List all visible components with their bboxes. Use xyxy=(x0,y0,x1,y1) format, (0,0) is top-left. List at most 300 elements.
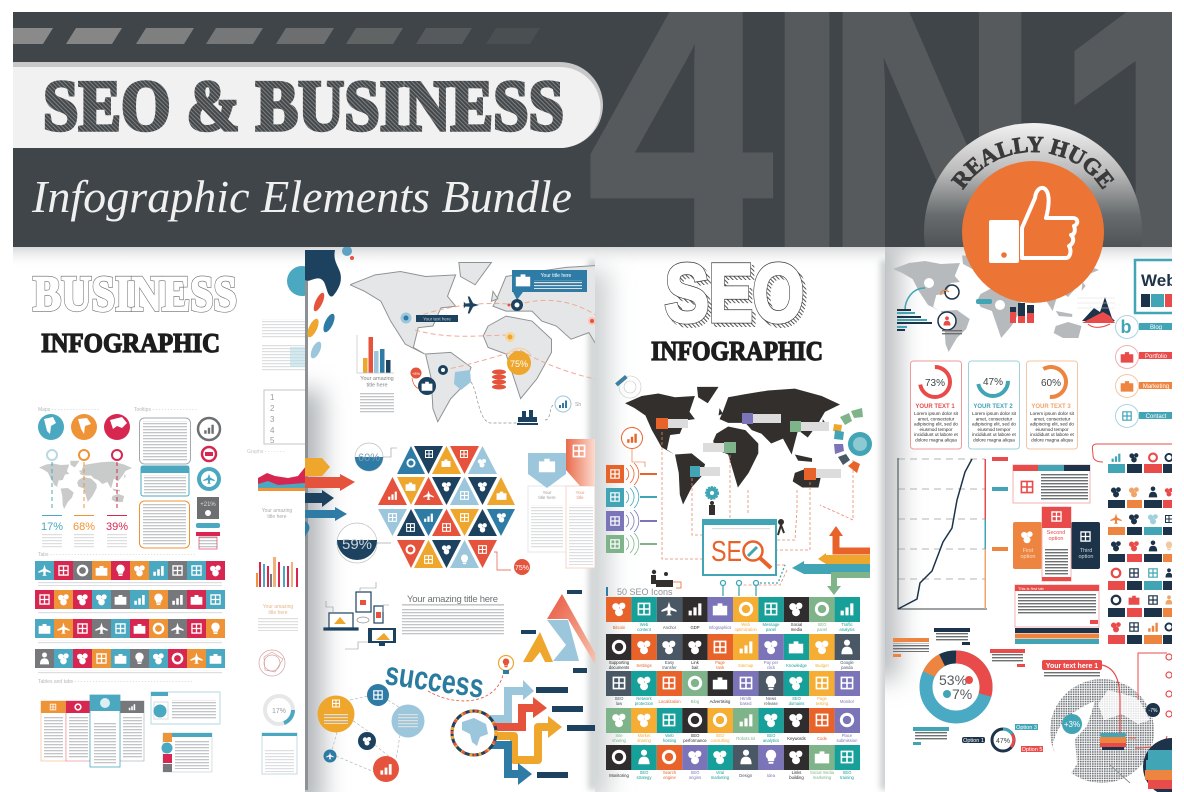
seo icon row 4 captions: Keywords xyxy=(787,736,806,741)
icon tabs row 2 xyxy=(35,590,225,609)
seo icon row 2 captions: rank xyxy=(716,665,725,670)
gray world map xyxy=(39,461,132,509)
donut chart: 53% xyxy=(939,672,967,688)
stat card 73%: dolore magna aliqua xyxy=(915,438,957,442)
globe stat -7% xyxy=(1146,703,1160,717)
peek page: area chart xyxy=(247,449,306,491)
seo icon row 4 captions: SEO xyxy=(767,733,775,738)
pill: your text here 1 xyxy=(1042,660,1120,735)
seo icon row 1 captions: SEO xyxy=(818,622,826,627)
peek page: donut xyxy=(265,696,293,724)
circle chart icon xyxy=(555,396,581,412)
stat card 60%: incididunt ut labore et xyxy=(1030,432,1075,437)
seo icon row 2 captions: documents xyxy=(609,665,629,670)
heading: infographic: INFOGRAPHIC xyxy=(651,336,823,366)
seo icon row 3 captions: Localization xyxy=(658,699,681,704)
icon: thumb xyxy=(989,188,1077,263)
heading: business: BUSINESS xyxy=(33,265,237,321)
seo browser window xyxy=(703,519,784,575)
triangle mosaic row 1 xyxy=(397,446,497,474)
seo icon row 4 captions: Code xyxy=(817,736,828,741)
seo icon row 5 captions: origins xyxy=(689,775,701,780)
seo icon row 2 captions: transfer xyxy=(662,665,677,670)
orange stat 75% xyxy=(507,348,531,375)
icon grid icons xyxy=(1110,453,1174,632)
seo icon row 4 captions: SEO xyxy=(691,733,699,738)
dashed ship route xyxy=(471,382,556,423)
seo icon row 3 captions: domains xyxy=(789,701,804,706)
peek page: note card xyxy=(262,733,297,774)
dark world map xyxy=(625,387,840,505)
pennant card: red: title xyxy=(576,495,584,500)
subtitle: Infographic Elements Bundle xyxy=(31,171,572,222)
seo icon row 3 captions: based xyxy=(740,701,752,706)
pennant card: blue xyxy=(528,453,566,552)
heading: success: success xyxy=(383,654,486,705)
stat card 60%: dolore magna aliqua xyxy=(1031,438,1073,442)
seo icon row 1 captions: Bitcoin xyxy=(613,625,626,630)
seo icon row 2 captions: Sitemap xyxy=(738,663,754,668)
seo icon row 3 captions xyxy=(615,696,855,706)
peek page: donut: 17% xyxy=(272,708,286,715)
seo icon row 5 captions: Monitoring xyxy=(609,773,629,778)
chart title xyxy=(360,376,394,413)
seo icon row 1 captions xyxy=(613,622,855,632)
page 1: business infographic xyxy=(33,265,317,774)
big 4in1 background lettering xyxy=(588,0,1184,391)
stat card 73%: eiusmod tempor xyxy=(920,427,953,432)
seo icon row 5 captions: building xyxy=(789,775,804,780)
percentage stats: 68% xyxy=(73,521,95,533)
options block xyxy=(1013,507,1100,581)
callout: your title here xyxy=(512,270,587,300)
percentage stats: 17% xyxy=(41,521,63,533)
section labels xyxy=(38,407,197,685)
triangle icons xyxy=(388,450,506,564)
heading: seo: SEO xyxy=(665,248,804,339)
stat card 47%: adipiscing elit, sed do xyxy=(972,422,1016,427)
section labels: Maps - - - - - - - - - - - - - - - - xyxy=(38,407,99,413)
pennant card: red xyxy=(566,439,595,568)
side navigation: Contact xyxy=(1146,414,1167,420)
seo icon row 4 captions: sharing xyxy=(612,738,627,743)
seo icon row 2 captions: Budget xyxy=(815,663,829,668)
world map xyxy=(350,262,595,423)
tooltip icons: +21% xyxy=(200,502,216,508)
seo icon row 1 captions: optimization xyxy=(735,627,758,632)
pennant card: blue: Your xyxy=(542,490,552,495)
side navigation: Blog xyxy=(1150,325,1162,331)
seo icon row 4 xyxy=(606,708,860,733)
icon grid title: 50 SEO Icons xyxy=(617,587,673,597)
heading: your amazing title here: Your amazing title here xyxy=(407,594,498,605)
badge ring xyxy=(924,123,1142,341)
peek page: numbered list: 4 xyxy=(270,426,275,435)
top banner xyxy=(13,12,1172,247)
seo icon row 4 captions: Market xyxy=(638,733,650,738)
seo icon row 1 captions: Traffic xyxy=(841,622,853,627)
stat circle 59% xyxy=(337,523,391,563)
map pin: north america: Your text here xyxy=(423,316,451,322)
devices xyxy=(324,582,396,649)
side navigation xyxy=(1116,316,1173,428)
seo icon row 3 captions: SEO xyxy=(615,696,623,701)
seo icon row 4 captions: analytics xyxy=(763,738,779,743)
seo icon row 5 captions: Links xyxy=(792,770,801,775)
seo icon row 5 captions: SEO xyxy=(843,770,851,775)
seo icon row 1 captions: panel xyxy=(766,627,776,632)
chevron triangles xyxy=(521,590,595,673)
route lines xyxy=(415,300,600,380)
seo icon row 1 xyxy=(606,597,860,622)
small donut with options: Option 5 xyxy=(1022,747,1042,753)
seo icon row 1 captions: Web xyxy=(741,622,750,627)
peek page: title and legend: title here xyxy=(268,610,288,616)
seo icon row 2 xyxy=(606,634,860,660)
fan wheel xyxy=(833,408,872,473)
callout: your title here: Your title here xyxy=(541,273,572,279)
small donut with options: Option 3 xyxy=(1016,725,1037,731)
page 4: mixed charts infographic xyxy=(893,256,1184,792)
seo icon row 5 captions: strategy xyxy=(637,775,652,780)
peek page: amazing title: Your amazing xyxy=(262,508,292,514)
map pin: europe xyxy=(508,299,523,311)
options block: Third xyxy=(1080,548,1092,554)
seo icon row 3 captions: Page xyxy=(817,696,827,701)
seo icon row 5 captions: Idea xyxy=(767,773,776,778)
dashed connectors xyxy=(662,432,853,585)
seo icon row 3 xyxy=(606,671,860,696)
stat card 47%: eiusmod tempor xyxy=(978,427,1011,432)
corner sphere xyxy=(1110,738,1184,792)
text panel with tabs xyxy=(1015,585,1099,644)
tab panel xyxy=(1013,465,1090,503)
map leader lines xyxy=(52,462,117,510)
map callouts xyxy=(656,413,841,480)
coins xyxy=(492,370,506,390)
seo icon row 5 captions: Social media xyxy=(810,770,834,775)
seo icon row 1 captions: Social xyxy=(791,622,802,627)
seo icon row 5 captions: Viral xyxy=(716,770,724,775)
triangle mosaic row 4 xyxy=(397,540,497,568)
seo icon row 5 captions: marketing xyxy=(813,775,832,780)
seo icon row 4 captions: Place xyxy=(842,733,852,738)
map pin: africa xyxy=(505,332,515,342)
stacked globe labels xyxy=(1100,733,1136,750)
red connector xyxy=(1092,444,1172,462)
seo icon row 5 xyxy=(606,745,860,770)
peek page: radar chart xyxy=(259,650,285,676)
seo icon row 3 captions: Blog xyxy=(691,699,700,704)
stat card 47%: incididunt ut labore et xyxy=(972,432,1017,437)
stat card 47% xyxy=(968,361,1020,449)
percentage stats: 39% xyxy=(106,521,128,533)
stat circle 59%: 59% xyxy=(342,536,372,553)
seo icon row 2 captions: Easy xyxy=(665,660,674,665)
triangle mosaic row 2 xyxy=(378,477,515,505)
seo icon row 5 captions: training xyxy=(840,775,855,780)
seo icon row 4 captions: Robots.txt xyxy=(736,736,756,741)
side navigation: b xyxy=(1120,317,1132,337)
dotted globe xyxy=(1050,679,1154,783)
seo icon row 2 captions: Link xyxy=(691,660,699,665)
stat card 73% xyxy=(910,361,962,449)
icon tab captions xyxy=(38,582,222,674)
peek page: numbered list xyxy=(264,390,309,445)
stat card 60%: eiusmod tempor xyxy=(1036,427,1069,432)
globes xyxy=(38,414,130,460)
seo icon row 3 captions: protection xyxy=(635,701,654,706)
seo icon row 1 captions: Infographics xyxy=(709,625,731,630)
stacked bars xyxy=(1010,303,1034,323)
heading: seo: SEO xyxy=(668,251,807,342)
icon grid captions xyxy=(1108,464,1173,644)
circle chart icon: Sh xyxy=(575,402,581,408)
badge text: REALLY HUGE xyxy=(950,136,1114,190)
page 2: travel and success infographic xyxy=(305,247,595,785)
seo icon row 5 captions: Search xyxy=(663,770,676,775)
seo icon row 4 captions: SEO xyxy=(716,733,724,738)
seo browser window: SE xyxy=(711,536,742,568)
seo icon row 4 captions: submission xyxy=(837,738,858,743)
stat card 60%: YOUR TEXT 3 xyxy=(1031,404,1071,410)
seo icon row 5 captions: Design xyxy=(739,773,753,778)
seo icon row 4 captions: Site xyxy=(615,733,623,738)
stat card 73%: incididunt ut labore et xyxy=(914,432,959,437)
seo icon row 3 captions: SEO xyxy=(792,696,801,701)
seo icon row 1 captions: GDP xyxy=(690,625,700,630)
seo icon row 3 captions: release xyxy=(764,701,779,706)
seo icon row 1 captions: content xyxy=(637,627,652,632)
peek page: numbered list: 5 xyxy=(270,436,275,445)
stat card 73%: 73% xyxy=(925,378,945,389)
seo icon row 2 captions: Google xyxy=(840,660,854,665)
peek page: bar chart xyxy=(256,557,298,587)
chart title: title here xyxy=(366,382,388,388)
page 3: seo infographic xyxy=(606,248,872,780)
text panel with tabs: This is first tab xyxy=(1018,586,1045,591)
stat card 47%: YOUR TEXT 2 xyxy=(973,404,1013,410)
stat circle 60%: 60% xyxy=(358,452,380,464)
red bracket xyxy=(1135,653,1167,748)
teal pill and marker xyxy=(976,299,1005,310)
seo icon row 2 captions: bait xyxy=(692,665,699,670)
orange stat 75%: 75% xyxy=(510,359,528,369)
section labels: Tabs - - - - - - - - - - - - - - - - - - - - - - - - - - - - - - - - - - - - - - - - - - - - - - - - xyxy=(38,552,195,558)
tooltip icons xyxy=(196,418,221,549)
seo icon row 5 captions xyxy=(609,770,855,780)
footprints xyxy=(307,292,335,358)
pricing table xyxy=(41,695,144,767)
ink splash xyxy=(305,246,354,297)
seo icon row 4 captions: consulting xyxy=(711,738,730,743)
globe with dashed ring xyxy=(452,711,496,755)
options block: option xyxy=(1048,536,1064,542)
seo icon row 2 captions: Pay per xyxy=(764,660,778,665)
stat card 73%: amet, consectetur xyxy=(918,416,955,421)
globe stat +3%: +3% xyxy=(1064,720,1080,729)
globe stat -7%: -7% xyxy=(1149,708,1158,714)
map rings xyxy=(924,278,962,336)
seo icon row 3 captions: testing xyxy=(816,701,829,706)
pennant card: red: Your xyxy=(575,490,585,495)
success arrows xyxy=(490,680,562,785)
hatched region xyxy=(454,370,471,390)
peek page: numbered list: 2 xyxy=(270,404,275,413)
seo icon row 4 captions: performance xyxy=(683,738,707,743)
heading: your amazing title here xyxy=(402,594,504,636)
seo icon row 1 captions: analysis xyxy=(839,627,855,632)
icon: plane xyxy=(464,297,479,313)
options block: option xyxy=(1078,554,1094,560)
stat card 60%: Lorem ipsum dolor sit xyxy=(1030,411,1075,416)
peek page: numbered list: 3 xyxy=(270,415,275,424)
pins xyxy=(720,565,785,596)
seo icon row 2 captions: Supporting xyxy=(609,660,629,665)
seo icon row 3 captions: Network xyxy=(636,696,652,701)
gray world map xyxy=(893,256,1099,352)
small donut with options: 47% xyxy=(996,738,1010,745)
stat card 60%: adipiscing elit, sed do xyxy=(1030,422,1074,427)
icon: satellite xyxy=(615,375,641,398)
seo icon row 4 captions: hosting xyxy=(663,738,677,743)
side navigation: Portfolio xyxy=(1145,354,1168,360)
icon: bulb with dashed path xyxy=(428,656,514,701)
peek page: user circle xyxy=(287,266,305,296)
horizontal bar chart xyxy=(897,288,932,331)
stat card 47%: amet, consectetur xyxy=(976,416,1013,421)
web box xyxy=(1135,260,1177,313)
tab boxes xyxy=(151,692,220,772)
seo icon row 3 captions: Advertising xyxy=(710,699,731,704)
seo icon row 2 captions: panda xyxy=(841,665,853,670)
area chart xyxy=(1077,297,1115,327)
pill: your text here 1: Your text here 1 xyxy=(1046,663,1098,670)
seo icon row 4 captions xyxy=(612,733,858,743)
options block: option xyxy=(1020,554,1036,560)
stat circle 75% xyxy=(494,552,530,575)
seo icon row 3 captions: law xyxy=(616,701,623,706)
stat card 73%: YOUR TEXT 1 xyxy=(915,404,955,410)
map pin: east xyxy=(588,317,595,325)
stat card 73%: Lorem ipsum dolor sit xyxy=(914,411,959,416)
seo icon row 3 captions: Html5 xyxy=(740,696,751,701)
stat card 47%: dolore magna aliqua xyxy=(973,438,1015,442)
decorative dashes xyxy=(13,28,540,44)
globe stat +3% xyxy=(1062,714,1082,734)
left arrows xyxy=(305,458,355,539)
seo icon row 4 captions: Web xyxy=(665,733,674,738)
person at desk xyxy=(651,570,681,588)
seo icon row 2 captions: Knowledge xyxy=(786,663,808,668)
triangle mosaic row 3 xyxy=(378,509,515,536)
person with gear xyxy=(706,487,718,515)
web box: Web xyxy=(1141,271,1177,290)
stat circle 60% xyxy=(355,443,397,471)
seo icon row 2 captions: click xyxy=(767,665,776,670)
seo icon row 3 captions: News xyxy=(766,696,776,701)
device tiles with signal waves xyxy=(606,463,657,555)
heading: infographic: INFOGRAPHIC xyxy=(41,328,220,358)
icon tabs row 4 xyxy=(35,649,225,668)
arrow labels xyxy=(536,687,595,778)
stat card 60% xyxy=(1026,361,1078,449)
small donut with options: Option 1 xyxy=(963,738,984,744)
bar chart xyxy=(357,335,394,373)
heading: business: BUSINESS xyxy=(33,265,237,321)
peek page: numbered list: 1 xyxy=(270,393,275,402)
seo icon row 2 captions: Settings xyxy=(636,663,652,668)
map pin: south america and truck: +8% xyxy=(412,371,420,376)
stat card 73%: adipiscing elit, sed do xyxy=(914,422,958,427)
title pill xyxy=(13,62,603,148)
seo icon row 2 captions: Page xyxy=(715,660,725,665)
seo icon row 1 captions: Message xyxy=(762,622,780,627)
small donut with options xyxy=(962,724,1043,753)
icon tabs row 1 xyxy=(35,561,225,580)
stat circle 75%: 75% xyxy=(515,565,529,572)
red speaker marks xyxy=(1166,654,1172,717)
donut chart xyxy=(926,657,986,717)
seo icon row 5 captions: SEO xyxy=(640,770,648,775)
stat card 47%: Lorem ipsum dolor sit xyxy=(972,411,1017,416)
seo icon row 2 captions xyxy=(609,660,854,670)
seo icon row 5 captions: SEO xyxy=(691,770,699,775)
peek page: title and legend xyxy=(258,604,298,631)
heading: seo: SEO xyxy=(665,248,804,339)
options block: First xyxy=(1023,548,1033,554)
side navigation: Marketing xyxy=(1143,384,1169,390)
donut chart: 7% xyxy=(952,686,972,702)
circle chart icon xyxy=(622,428,645,467)
peek page: title and legend: Your amazing xyxy=(263,604,293,610)
arrows right xyxy=(792,526,870,595)
peek page: area chart: Graphs - - - - - - - xyxy=(247,449,285,455)
page shading xyxy=(13,240,1172,792)
seo icon row 5 captions: engine xyxy=(663,775,676,780)
heading: business xyxy=(32,276,236,312)
seo icon row 1 captions: Anchor xyxy=(663,625,677,630)
icon tabs row 3 xyxy=(35,619,225,638)
connected circles xyxy=(318,684,424,782)
map pin: south america and truck xyxy=(410,365,448,395)
title: seo and business: SEO & BUSINESS xyxy=(43,66,564,146)
section labels: Tooltips - - - - - - - - - - - - - - - xyxy=(134,407,197,413)
peek page: table xyxy=(262,319,305,371)
seo icon row 5 captions: marketing xyxy=(711,775,730,780)
map pin: north america xyxy=(400,312,458,324)
seo icon row 1 captions: media xyxy=(791,627,803,632)
stat card 60%: amet, consectetur xyxy=(1034,416,1071,421)
line chart xyxy=(898,457,1008,609)
percentage stats xyxy=(41,515,128,548)
stat card 47%: 47% xyxy=(983,377,1003,388)
donut labels xyxy=(893,628,1025,745)
badge: thumbs up xyxy=(962,161,1104,303)
options block: Second xyxy=(1047,530,1065,536)
stat card 60%: 60% xyxy=(1041,378,1061,389)
pennant card: blue: title here xyxy=(538,495,556,500)
chart title: Your amazing xyxy=(360,376,394,382)
seo icon row 1 captions: panel xyxy=(817,627,827,632)
icon: ship xyxy=(517,410,538,425)
tooltips xyxy=(140,418,190,548)
seo icon row 4 captions: sharing xyxy=(637,738,652,743)
section labels: Tables and tabs - - - - - - - - - - - - - - - - - - - - - - - - - - - - - - - - - - - - - - - xyxy=(38,679,192,685)
peek page: amazing title: title here xyxy=(267,514,287,520)
seo icon row 1 captions: Web xyxy=(640,622,648,627)
seo icon row 3 captions: Monitor xyxy=(840,699,855,704)
